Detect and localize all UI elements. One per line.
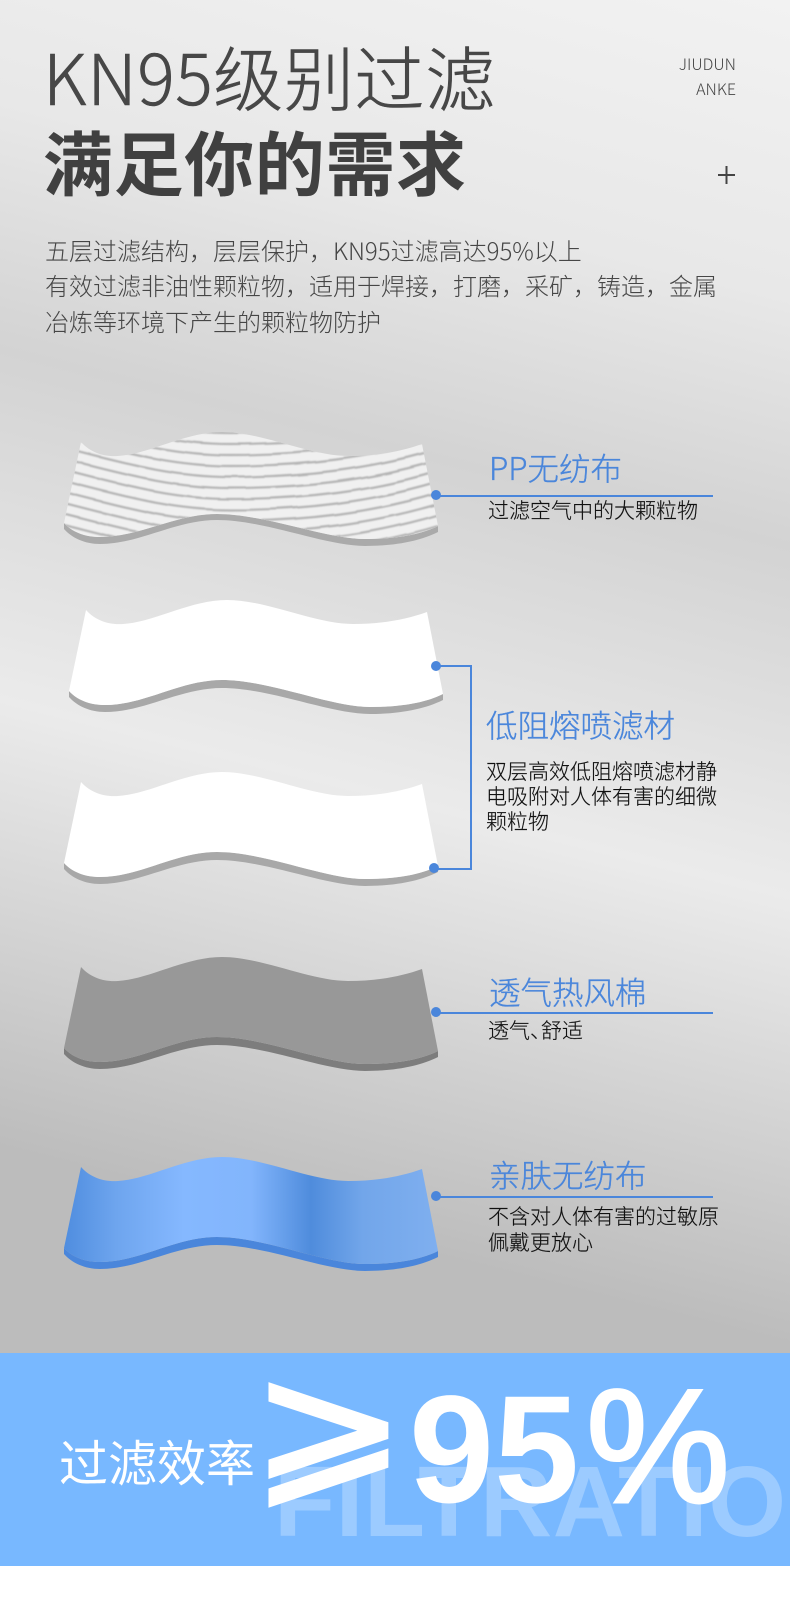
efficiency value: 95 (409, 1364, 579, 1535)
brand label: JIUDUN (679, 51, 736, 75)
callout: melt-blown filter with bracket: 颗粒物 (486, 806, 549, 836)
layer 2: melt-blown filter sheet upper (69, 600, 443, 714)
callout: skin-friendly nonwoven (431, 1151, 719, 1257)
callout: hot-air cotton: 透气、舒适 (488, 1015, 583, 1045)
greater-or-equal sign: ⩾ (251, 1326, 406, 1524)
efficiency value (409, 1356, 730, 1537)
callout: skin-friendly nonwoven: 佩戴更放心 (488, 1227, 593, 1257)
callout: melt-blown filter with bracket: 双层高效低阻熔喷滤材静 (486, 756, 717, 786)
title (43, 25, 495, 211)
layer 1: PP nonwoven fabric sheet (64, 432, 438, 546)
watermark word: FILTRATIO (274, 1446, 786, 1558)
callout: PP nonwoven: 过滤空气中的大颗粒物 (488, 495, 698, 525)
efficiency label: 过滤效率 (59, 1425, 255, 1496)
layer 4: hot-air cotton sheet (64, 957, 438, 1071)
efficiency value: % (586, 1356, 730, 1537)
callout: melt-blown filter with bracket: 低阻熔喷滤材 (486, 701, 675, 747)
intro text: 有效过滤非油性颗粒物，适用于焊接，打磨，采矿，铸造，金属 (45, 267, 717, 302)
callout: hot-air cotton: 透气热风棉 (489, 968, 647, 1014)
callout: melt-blown filter with bracket (429, 661, 717, 873)
layer 5: skin-friendly nonwoven sheet (64, 1157, 438, 1271)
title: 满足你的需求 (43, 110, 466, 211)
callout: skin-friendly nonwoven: 亲肤无纺布 (489, 1151, 647, 1197)
icon: plus (718, 166, 735, 184)
intro text: 五层过滤结构，层层保护，KN95过滤高达95%以上 (45, 232, 582, 267)
callout: PP nonwoven (431, 444, 713, 525)
callout: hot-air cotton (431, 968, 713, 1045)
callout: PP nonwoven: PP无纺布 (489, 444, 622, 490)
intro text: 冶炼等环境下产生的颗粒物防护 (45, 303, 381, 338)
brand label (679, 51, 736, 100)
callout: skin-friendly nonwoven: 不含对人体有害的过敏原 (488, 1201, 719, 1231)
bottom band: filtration efficiency (0, 1353, 790, 1604)
layer 3: melt-blown filter sheet lower (64, 772, 438, 886)
title: KN95级别过滤 (43, 25, 495, 126)
callout: melt-blown filter with bracket: 电吸附对人体有害的细微 (486, 781, 717, 811)
brand label: ANKE (696, 76, 736, 100)
intro text (45, 232, 717, 338)
